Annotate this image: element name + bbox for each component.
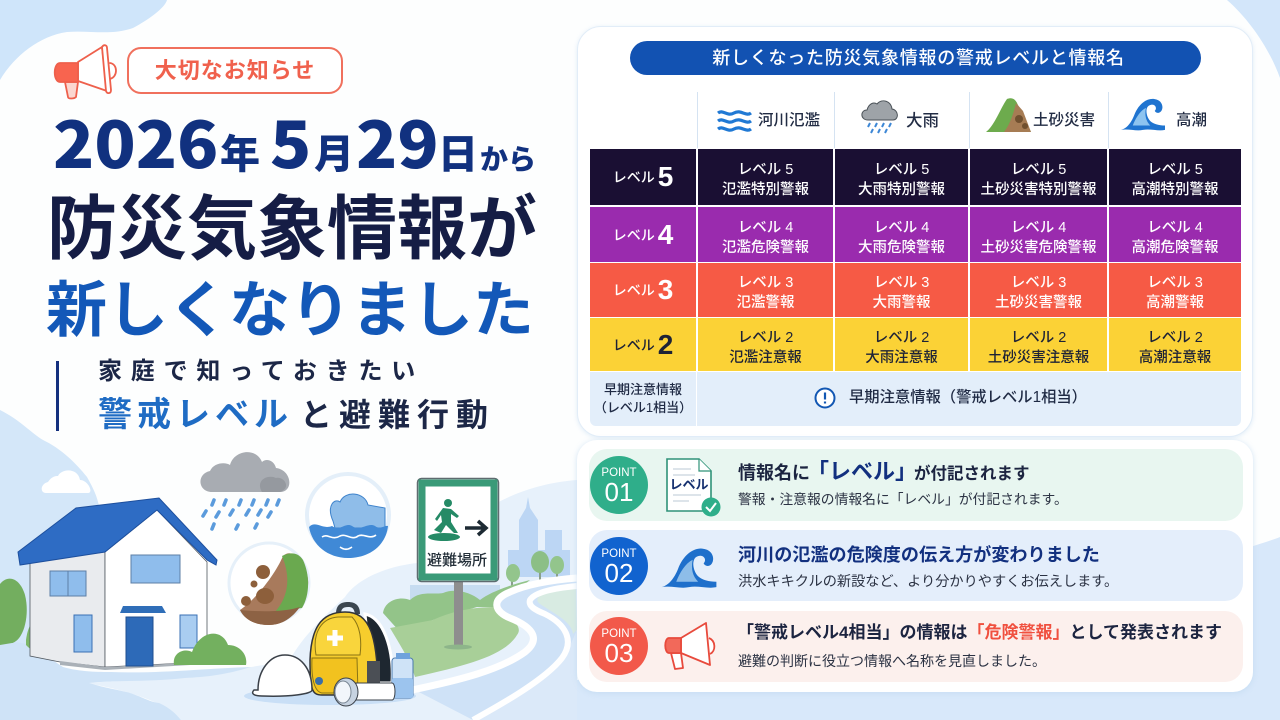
cell bbox=[698, 318, 833, 371]
cell: レベル 5 bbox=[1011, 162, 1066, 178]
row label: レベル bbox=[613, 282, 655, 298]
point 03 bbox=[589, 611, 1243, 682]
illustration: emergency kit bbox=[244, 602, 416, 706]
badge 01 bbox=[590, 456, 648, 514]
cell: レベル 2 bbox=[874, 330, 929, 346]
title: date: から bbox=[480, 138, 536, 178]
badge 03: 03 bbox=[605, 638, 633, 668]
cell: 高潮危険警報 bbox=[1132, 240, 1218, 256]
flashlight bbox=[334, 678, 395, 706]
cell bbox=[1109, 263, 1241, 317]
badge: important notice bbox=[127, 47, 343, 94]
illustration: winding road bbox=[412, 578, 577, 720]
cell: 土砂災害注意報 bbox=[988, 350, 1089, 366]
badge 02: 02 bbox=[605, 558, 633, 588]
badge: important notice: 大切なお知らせ bbox=[155, 58, 315, 83]
cell bbox=[698, 149, 833, 205]
cell: レベル 5 bbox=[738, 162, 793, 178]
cell bbox=[835, 207, 968, 262]
row: early notice bbox=[590, 372, 1241, 426]
row: level 4 bbox=[590, 207, 1241, 262]
cell: 氾濫注意報 bbox=[729, 350, 802, 366]
cell: レベル 5 bbox=[1147, 162, 1203, 178]
cell: レベル 2 bbox=[1011, 330, 1066, 346]
illustration: evacuation sign bbox=[418, 478, 498, 650]
illustration: small cloud bbox=[42, 470, 90, 493]
cell: レベル 4 bbox=[1011, 220, 1066, 236]
illustration: landslide circle bbox=[229, 543, 309, 625]
column head: landslide bbox=[969, 92, 1108, 148]
table heading bbox=[630, 41, 1201, 75]
row: level 5 bbox=[590, 149, 1241, 205]
cell: 大雨注意報 bbox=[865, 350, 938, 366]
cell: 土砂災害危険警報 bbox=[980, 240, 1096, 256]
point 01 heading: 情報名に「レベル」が付記されます bbox=[738, 459, 1030, 484]
row: level 2 bbox=[590, 318, 1241, 371]
cell: レベル 5 bbox=[874, 162, 929, 178]
cell: レベル 4 bbox=[738, 220, 793, 236]
early notice text: 早期注意情報（警戒レベル1相当） bbox=[849, 389, 1087, 406]
backpack bbox=[310, 602, 392, 695]
icon: landslide bbox=[986, 98, 1031, 132]
row label bbox=[590, 318, 696, 371]
icon: river waves bbox=[717, 110, 752, 132]
subtitle accent bar bbox=[56, 361, 59, 431]
title: date: 月 bbox=[314, 122, 354, 180]
cell bbox=[970, 149, 1107, 205]
illustration: city trees bbox=[506, 551, 564, 590]
cell bbox=[1109, 318, 1241, 371]
badge 02: POINT bbox=[601, 548, 637, 560]
panel: points bbox=[577, 440, 1253, 692]
cell: レベル 2 bbox=[1147, 330, 1203, 346]
cell: 土砂災害警報 bbox=[995, 295, 1082, 311]
cell: レベル 3 bbox=[1011, 275, 1066, 291]
cell bbox=[970, 318, 1107, 371]
cell bbox=[698, 263, 833, 317]
badge 02 bbox=[590, 537, 648, 595]
title: line 3: 新しくなりました bbox=[46, 276, 534, 344]
icon: wave bbox=[662, 548, 716, 588]
cell: 大雨危険警報 bbox=[858, 240, 945, 256]
row label bbox=[590, 149, 696, 205]
illustration: evacuation sign: 避難場所 bbox=[427, 552, 487, 569]
row: level 3 bbox=[590, 263, 1241, 317]
row label bbox=[590, 207, 696, 262]
illustration: city bbox=[508, 497, 570, 577]
cell bbox=[1109, 149, 1241, 205]
row label: 4 bbox=[658, 218, 673, 250]
icon: megaphone bbox=[664, 622, 716, 670]
cell: 高潮警報 bbox=[1146, 295, 1204, 311]
badge 03: POINT bbox=[601, 628, 637, 640]
point 01 text: 警報・注意報の情報名に「レベル」が付記されます。 bbox=[738, 492, 1068, 507]
badge 01: 01 bbox=[605, 477, 633, 507]
subtitle block bbox=[56, 358, 495, 434]
illustration: green hill bbox=[383, 580, 530, 677]
row label: 3 bbox=[658, 274, 673, 305]
row label: レベル bbox=[613, 169, 655, 185]
icon: exclamation bbox=[814, 388, 836, 408]
point 03 text: 避難の判断に役立つ情報へ名称を見直しました。 bbox=[738, 653, 1046, 669]
cell: 氾濫警報 bbox=[736, 295, 794, 311]
point 01 bbox=[589, 449, 1243, 521]
cell: 土砂災害特別警報 bbox=[980, 182, 1096, 198]
cell bbox=[970, 263, 1107, 317]
cell bbox=[698, 207, 833, 262]
point 02 bbox=[589, 530, 1243, 601]
subtitle line 1: 家庭で知っておきたい bbox=[98, 358, 424, 385]
badge 03 bbox=[590, 617, 648, 675]
column head: rain: 大雨 bbox=[906, 112, 939, 130]
row label: 5 bbox=[658, 161, 673, 192]
cell bbox=[1109, 207, 1241, 262]
cell: 氾濫危険警報 bbox=[722, 240, 809, 256]
helmet bbox=[253, 655, 312, 696]
cell: 大雨警報 bbox=[872, 295, 930, 311]
row label: 2 bbox=[658, 328, 673, 360]
subtitle line 2: 警戒レベルと避難行動 bbox=[98, 396, 495, 434]
row label bbox=[590, 263, 696, 317]
title: line 2: 防災気象情報が bbox=[47, 190, 537, 268]
point 02 heading: 河川の氾濫の危険度の伝え方が変わりました bbox=[738, 545, 1100, 565]
column head: storm surge bbox=[1108, 92, 1241, 148]
row label: レベル bbox=[613, 226, 655, 242]
title: date: 29 bbox=[356, 95, 439, 187]
icon: rain cloud bbox=[861, 100, 898, 134]
column head: rain bbox=[834, 92, 969, 148]
cell: レベル 3 bbox=[1147, 275, 1203, 291]
cell: レベル 2 bbox=[738, 330, 793, 346]
cell: 大雨特別警報 bbox=[858, 182, 945, 198]
row label: レベル bbox=[613, 336, 655, 352]
table heading: 新しくなった防災気象情報の警戒レベルと情報名 bbox=[712, 48, 1125, 68]
cell: レベル 4 bbox=[1147, 220, 1203, 236]
row label bbox=[590, 372, 697, 426]
cell: レベル 3 bbox=[874, 275, 929, 291]
cell: 高潮注意報 bbox=[1139, 350, 1211, 366]
cell bbox=[835, 149, 968, 205]
badge 01: POINT bbox=[601, 467, 637, 479]
illustration: trees bbox=[0, 579, 61, 660]
cell bbox=[835, 263, 968, 317]
illustration: rain cloud bbox=[200, 452, 289, 529]
icon: wave bbox=[1121, 98, 1165, 130]
point 02 text: 洪水キキクルの新設など、より分かりやすくお伝えします。 bbox=[738, 574, 1118, 590]
cell: レベル 3 bbox=[738, 275, 793, 291]
icon: document bbox=[666, 458, 720, 516]
illustration: flood circle bbox=[307, 474, 389, 558]
bottle bbox=[392, 653, 413, 698]
title: date: 日 bbox=[438, 122, 478, 180]
cell: 氾濫特別警報 bbox=[722, 182, 809, 198]
panel: warning table bbox=[577, 26, 1253, 437]
title: date bbox=[53, 95, 536, 187]
cell: レベル 4 bbox=[874, 220, 929, 236]
column head: river bbox=[697, 92, 834, 148]
column head: landslide: 土砂災害 bbox=[1033, 112, 1095, 129]
title: date: 5 bbox=[270, 95, 311, 187]
column head: storm surge: 高潮 bbox=[1176, 112, 1207, 129]
title: date: 2026 bbox=[53, 95, 218, 187]
cell bbox=[970, 207, 1107, 262]
row label: 早期注意情報 bbox=[604, 382, 682, 397]
cell: 高潮特別警報 bbox=[1132, 182, 1218, 198]
column head: river: 河川氾濫 bbox=[758, 112, 820, 129]
point 03 heading: 「警戒レベル4相当」の情報は「危険警報」として発表されます bbox=[737, 623, 1222, 642]
cell bbox=[835, 318, 968, 371]
icon: document: レベル bbox=[669, 477, 709, 492]
illustration: house bbox=[18, 498, 246, 670]
icon: megaphone bbox=[54, 44, 117, 100]
row label: （レベル1相当） bbox=[594, 400, 692, 415]
title: date: 年 bbox=[220, 122, 260, 180]
